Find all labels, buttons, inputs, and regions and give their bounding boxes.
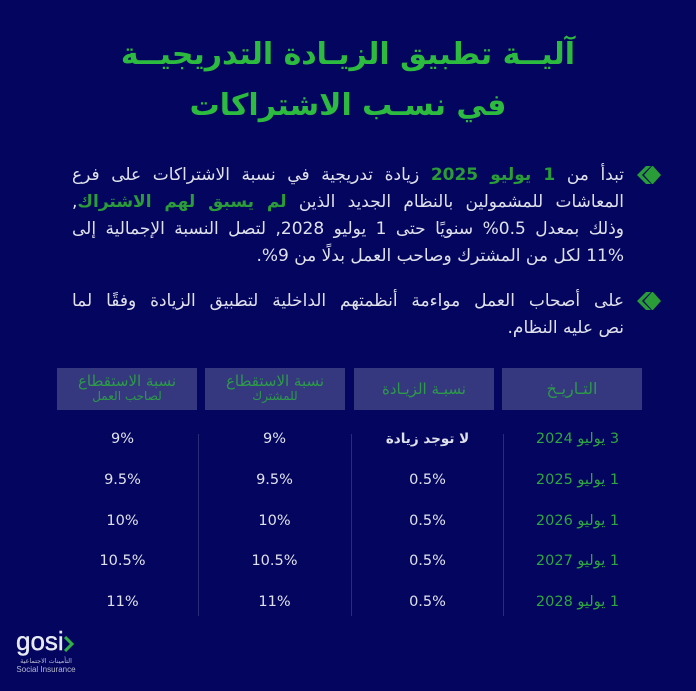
bullet icon: second paragraph — [637, 292, 661, 310]
table row 2024: 9% — [111, 431, 134, 447]
table header: increase rate: نسبـة الزيـادة — [382, 380, 466, 398]
table row 2025: 9.5% — [256, 472, 293, 488]
table row 2027: 0.5% — [409, 553, 446, 569]
paragraph: gradual increase: 11% لكل من المشترك وصاحب العمل بدلًا من 9%. — [256, 246, 624, 266]
table header: date: التـاريـخ — [547, 379, 597, 398]
table row 2026 — [106, 513, 619, 529]
table row 2025: 9.5% — [104, 472, 141, 488]
bullet icon: first paragraph — [637, 166, 661, 184]
table row 2025: 1 يوليو 2025 — [536, 472, 619, 488]
paragraph: employers: نص عليه النظام. — [508, 318, 624, 338]
table row 2026: 1 يوليو 2026 — [536, 513, 619, 529]
table header: employer deduction: نسبة الاستقطاع — [78, 372, 176, 390]
paragraph: employers: على أصحاب العمل مواءمة أنظمتهم الداخلية لتطبيق الزيادة وفقًا لما — [72, 291, 624, 311]
title: آليــة تطبيق الزيـادة التدريجيــة — [121, 37, 575, 72]
table row 2027: 10.5% — [99, 553, 146, 569]
table row 2028: 1 يوليو 2028 — [536, 594, 619, 610]
table row 2028: 11% — [106, 594, 139, 610]
paragraph: gradual increase — [72, 163, 624, 266]
paragraph: gradual increase: تبدأ من 1 يوليو 2025 زيادة تدريجية في نسبة الاشتراكات على فرع — [72, 165, 624, 185]
table row 2026: 0.5% — [409, 513, 446, 529]
table header: subscriber deduction — [205, 368, 345, 410]
title — [121, 36, 576, 123]
table row 2027 — [99, 553, 619, 569]
table row 2027: 1 يوليو 2027 — [536, 553, 619, 569]
table row 2026: 10% — [258, 513, 291, 529]
paragraph: gradual increase: وذلك بمعدل 0.5% سنويًا حتى 1 يوليو 2028, لتصل النسبة الإجمالية إلى — [72, 219, 624, 239]
table header: date — [502, 368, 642, 410]
table row 2028: 0.5% — [409, 594, 446, 610]
table header: subscriber deduction: نسبة الاستقطاع — [226, 372, 324, 390]
logo: gosi — [16, 626, 76, 674]
table row 2025 — [104, 472, 619, 488]
table header: increase rate — [354, 368, 494, 410]
table row 2027: 10.5% — [251, 553, 298, 569]
table row 2024: 9% — [263, 431, 286, 447]
paragraph: gradual increase: المعاشات للمشمولين بالنظام الجديد الذين لم يسبق لهم الاشتراك, — [72, 192, 624, 212]
table header: employer deduction — [57, 368, 197, 410]
table row 2025: 0.5% — [409, 472, 446, 488]
paragraph: employers — [72, 289, 624, 338]
table row 2024 — [111, 431, 619, 447]
title: في نسـب الاشتراكات — [190, 88, 506, 123]
logo: gosi: gosi — [16, 626, 64, 656]
logo: gosi: التأمينات الاجتماعية — [20, 657, 72, 665]
table row 2028: 11% — [258, 594, 291, 610]
logo: gosi: Social Insurance — [16, 665, 76, 674]
table row 2026: 10% — [106, 513, 139, 529]
table row 2024: 3 يوليو 2024 — [536, 431, 619, 447]
table header: subscriber deduction: للمشترك — [252, 389, 298, 403]
table row 2024: لا توجد زيادة — [386, 431, 469, 447]
table header: employer deduction: لصاحب العمل — [92, 389, 162, 403]
table row 2028 — [106, 594, 619, 610]
